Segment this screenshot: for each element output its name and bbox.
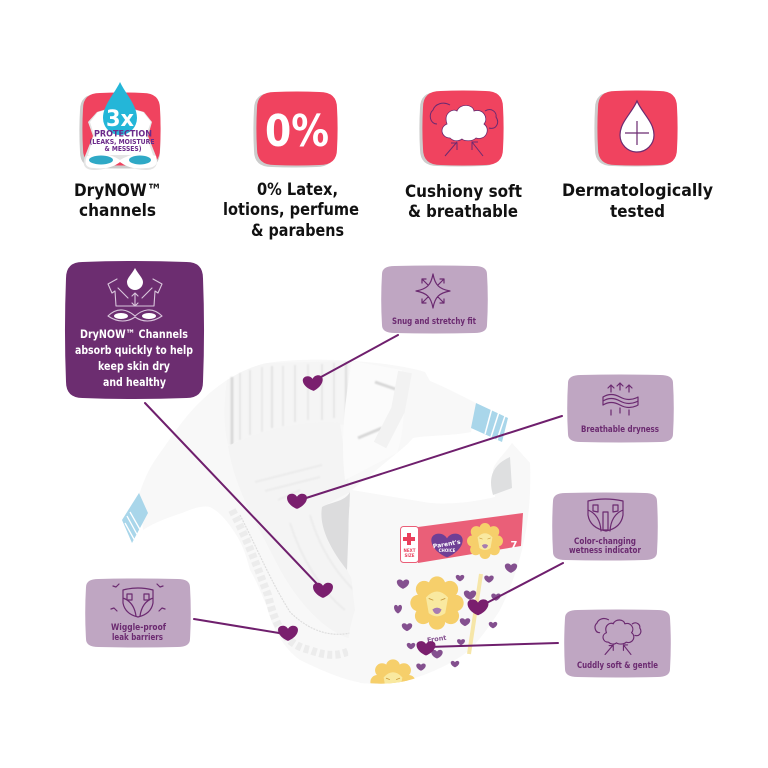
lion prints xyxy=(410,576,464,630)
callout line: leak barriers xyxy=(194,619,285,634)
diaper illustration: CHOICE xyxy=(439,548,456,553)
icon: zero percent: 0% xyxy=(265,106,329,157)
callout line: wetness indicator xyxy=(479,563,563,607)
heading: zero percent xyxy=(223,180,359,241)
icon: DryNOW channels badge: & MESSES) xyxy=(104,145,142,153)
panel: DryNOW Channels xyxy=(65,261,204,399)
icon: DryNOW channels badge: (LEAKS, MOISTURE xyxy=(90,138,155,146)
panel: breathable dryness xyxy=(567,374,674,443)
label: wetness indicator xyxy=(569,546,642,556)
heading: DryNOW channels: DryNOW™ xyxy=(74,181,162,201)
diaper illustration: 7 xyxy=(511,540,518,551)
callout line: breathable dryness xyxy=(303,416,562,499)
heading: cushiony soft: & breathable xyxy=(408,202,518,222)
left tab xyxy=(122,493,148,543)
waist streak panel xyxy=(224,361,350,445)
icon: stretch star xyxy=(416,274,450,308)
icon: cloud xyxy=(595,619,641,654)
icon: breathable layers xyxy=(603,383,638,415)
text: DryNOW description: and healthy xyxy=(103,375,166,389)
label xyxy=(111,623,166,643)
panel: wiggle-proof leak barriers xyxy=(85,578,191,648)
size band xyxy=(418,513,523,563)
callout line: soft and gentle xyxy=(428,643,558,647)
panel: color-changing wetness indicator xyxy=(552,492,658,561)
text: DryNOW description: keep skin dry xyxy=(98,359,170,373)
icon: dermatologically tested drop xyxy=(594,90,678,167)
heading: DryNOW channels: channels xyxy=(79,201,156,221)
heading: cushiony soft xyxy=(405,182,522,222)
icon: DryNOW channels badge xyxy=(79,82,161,170)
label: Wiggle-proof xyxy=(111,623,166,633)
text: DryNOW description xyxy=(75,327,193,389)
front label: Front xyxy=(427,634,447,644)
marker hearts xyxy=(278,375,488,656)
diaper illustration: SIZE xyxy=(404,553,415,558)
front waistband xyxy=(348,443,530,683)
label: Snug and stretchy fit xyxy=(392,317,476,327)
leg ruffle xyxy=(232,510,370,655)
diaper illustration: Parent's xyxy=(432,539,461,550)
icon: channels xyxy=(108,268,162,321)
small heart pattern xyxy=(394,564,517,671)
inner grey pocket xyxy=(321,492,350,570)
right tab xyxy=(471,403,508,442)
panel: cuddly soft and gentle xyxy=(564,609,671,678)
back body xyxy=(139,360,530,684)
callout line: snug fit xyxy=(321,335,398,377)
label xyxy=(569,537,642,556)
heading: dermatologically tested: tested xyxy=(610,202,665,222)
heading: dermatologically tested xyxy=(562,181,713,222)
right wing folds xyxy=(343,361,404,480)
icon: wiggle diaper xyxy=(111,584,165,617)
heading: dermatologically tested: Dermatologically xyxy=(562,181,713,201)
text: DryNOW description: DryNOW™ Channels xyxy=(80,327,188,341)
centre absorbent panel xyxy=(228,422,367,640)
label: leak barriers xyxy=(112,633,163,643)
panel: snug and stretchy fit xyxy=(381,265,488,334)
label: Color-changing xyxy=(574,537,636,547)
heading: zero percent: 0% Latex, xyxy=(257,180,338,200)
callout line: DryNOW channels xyxy=(145,403,320,587)
diaper illustration xyxy=(122,360,530,705)
icon: diaper indicator xyxy=(588,499,623,531)
label: Cuddly soft & gentle xyxy=(577,661,658,671)
icon: DryNOW channels badge: PROTECTION xyxy=(94,130,152,140)
heading: zero percent: & parabens xyxy=(251,221,344,241)
icon: zero percent xyxy=(253,91,338,168)
label: Breathable dryness xyxy=(581,425,659,435)
diaper illustration: NEXT xyxy=(404,548,416,553)
text: DryNOW description: absorb quickly to help xyxy=(75,343,193,357)
heading: DryNOW channels xyxy=(74,181,162,221)
icon: cushiony cloud xyxy=(419,90,504,167)
icon: DryNOW channels badge: 3x xyxy=(106,107,134,132)
heading: cushiony soft: Cushiony soft xyxy=(405,182,522,202)
heading: zero percent: lotions, perfume xyxy=(223,200,359,220)
